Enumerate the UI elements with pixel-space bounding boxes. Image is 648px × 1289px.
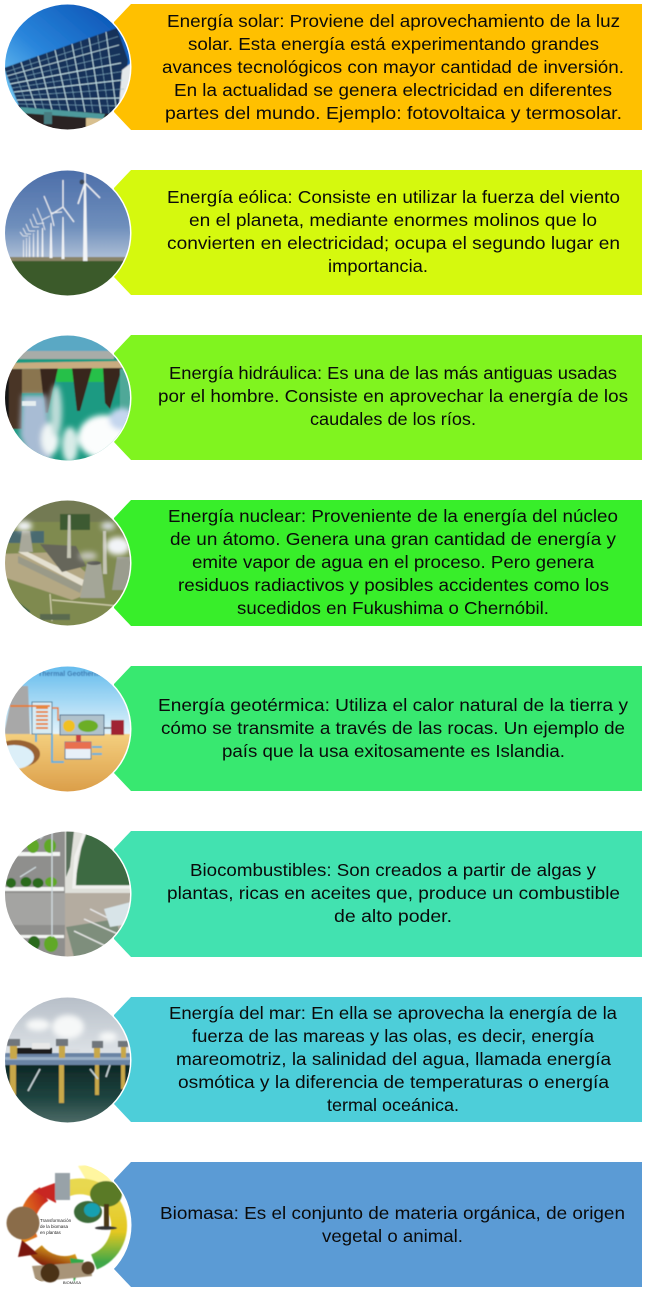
solar banner <box>114 4 642 130</box>
biocombustibles banner <box>114 831 642 957</box>
text: energía del mar: fuerza de las mareas y las olas, es decir, energía <box>192 1026 594 1046</box>
icon: algae cultivation <box>5 832 132 956</box>
icon: biomass cycle: BIOMASA <box>63 1280 81 1285</box>
text: energía eólica: en el planeta, mediante enormes molinos que lo <box>189 210 597 230</box>
text: energía del mar: mareomotriz, la salinidad del agua, llamada energía <box>176 1049 611 1069</box>
icon: ocean energy platforms <box>5 998 132 1122</box>
panel: biocombustibles <box>0 827 642 962</box>
text: energía nuclear: residuos radiactivos y posibles accidentes como los <box>178 575 609 595</box>
icon: biomass cycle: Transformación <box>40 1218 72 1223</box>
panel: biomasa <box>4 1161 642 1289</box>
text: biocombustibles: Biocombustibles: Son creados a partir de algas y <box>190 860 596 880</box>
text: energía nuclear: sucedidos en Fukushima o Chernóbil. <box>237 598 549 618</box>
text: energía solar: solar. Esta energía está experimentando grandes <box>188 34 599 54</box>
text: biocombustibles: de alto poder. <box>334 906 452 926</box>
panel: energía hidráulica <box>0 331 642 466</box>
text: energía eólica: Energía eólica: Consiste en utilizar la fuerza del viento <box>167 187 620 207</box>
nuclear banner <box>114 500 642 626</box>
text: energía hidráulica <box>158 363 628 429</box>
text: energía nuclear: emite vapor de agua en el proceso. Pero genera <box>192 552 594 572</box>
text: energía eólica: importancia. <box>328 256 428 276</box>
biomasa banner <box>114 1162 642 1287</box>
text: biocombustibles <box>167 860 620 926</box>
text: energía solar <box>162 11 624 123</box>
icon: geothermal plant diagram <box>5 666 132 792</box>
text: biomasa: Biomasa: Es el conjunto de materia orgánica, de origen <box>160 1203 625 1223</box>
text: biomasa <box>160 1203 625 1246</box>
text: energía solar: avances tecnológicos con mayor cantidad de inversión. <box>162 57 624 77</box>
text: energía solar: En la actualidad se genera electricidad en diferentes <box>174 80 612 100</box>
text: energía geotérmica: Energía geotérmica: Utiliza el calor natural de la tierra y <box>158 695 628 715</box>
icon: solar panels <box>5 4 132 130</box>
panel: energía del mar <box>0 993 642 1130</box>
panel: energía eólica <box>0 164 642 301</box>
text: energía geotérmica: país que la usa exitosamente es Islandia. <box>222 741 565 761</box>
panel: energía geotérmica <box>0 662 642 797</box>
text: energía geotérmica <box>158 695 628 761</box>
mar banner <box>114 997 642 1122</box>
eólica banner <box>114 170 642 295</box>
geotérmica banner <box>114 666 642 791</box>
panel: energía solar <box>0 0 642 135</box>
text: energía del mar: osmótica y la diferencia de temperaturas o energía <box>178 1072 609 1092</box>
text: energía nuclear: de un átomo. Genera una gran cantidad de energía y <box>170 529 616 549</box>
text: energía nuclear <box>168 506 618 618</box>
text: energía nuclear: Energía nuclear: Proveniente de la energía del núcleo <box>168 506 618 526</box>
text: energía hidráulica: caudales de los ríos. <box>310 409 476 429</box>
text: biomasa: vegetal o animal. <box>322 1226 463 1246</box>
icon: biomass cycle: en plantas <box>40 1230 62 1235</box>
panel: energía nuclear <box>0 496 642 631</box>
text: energía solar: partes del mundo. Ejemplo: fotovoltaica y termosolar. <box>165 103 622 123</box>
text: energía geotérmica: cómo se transmite a través de las rocas. Un ejemplo de <box>161 718 625 738</box>
icon: nuclear plant <box>5 500 132 626</box>
icon: biomass cycle <box>4 1161 132 1289</box>
hidráulica banner <box>114 335 642 460</box>
text: energía eólica <box>167 187 620 276</box>
text: energía hidráulica: Energía hidráulica: Es una de las más antiguas usadas <box>169 363 617 383</box>
text: energía eólica: convierten en electricidad; ocupa el segundo lugar en <box>167 233 620 253</box>
text: energía hidráulica: por el hombre. Consiste en aprovechar la energía de los <box>158 386 628 406</box>
text: energía del mar: Energía del mar: En ella se aprovecha la energía de la <box>169 1003 617 1023</box>
text: biocombustibles: plantas, ricas en aceites que, produce un combustible <box>167 883 620 903</box>
icon: geothermal plant diagram: Thermal Geothermal <box>38 671 106 678</box>
text: energía solar: Energía solar: Proviene del aprovechamiento de la luz <box>167 11 620 31</box>
icon: hydroelectric dam <box>5 336 132 460</box>
icon: biomass cycle: de la biomasa <box>40 1224 69 1229</box>
text: energía del mar <box>169 1003 617 1115</box>
text: energía del mar: termal oceánica. <box>327 1095 459 1115</box>
icon: wind turbines <box>5 170 132 296</box>
